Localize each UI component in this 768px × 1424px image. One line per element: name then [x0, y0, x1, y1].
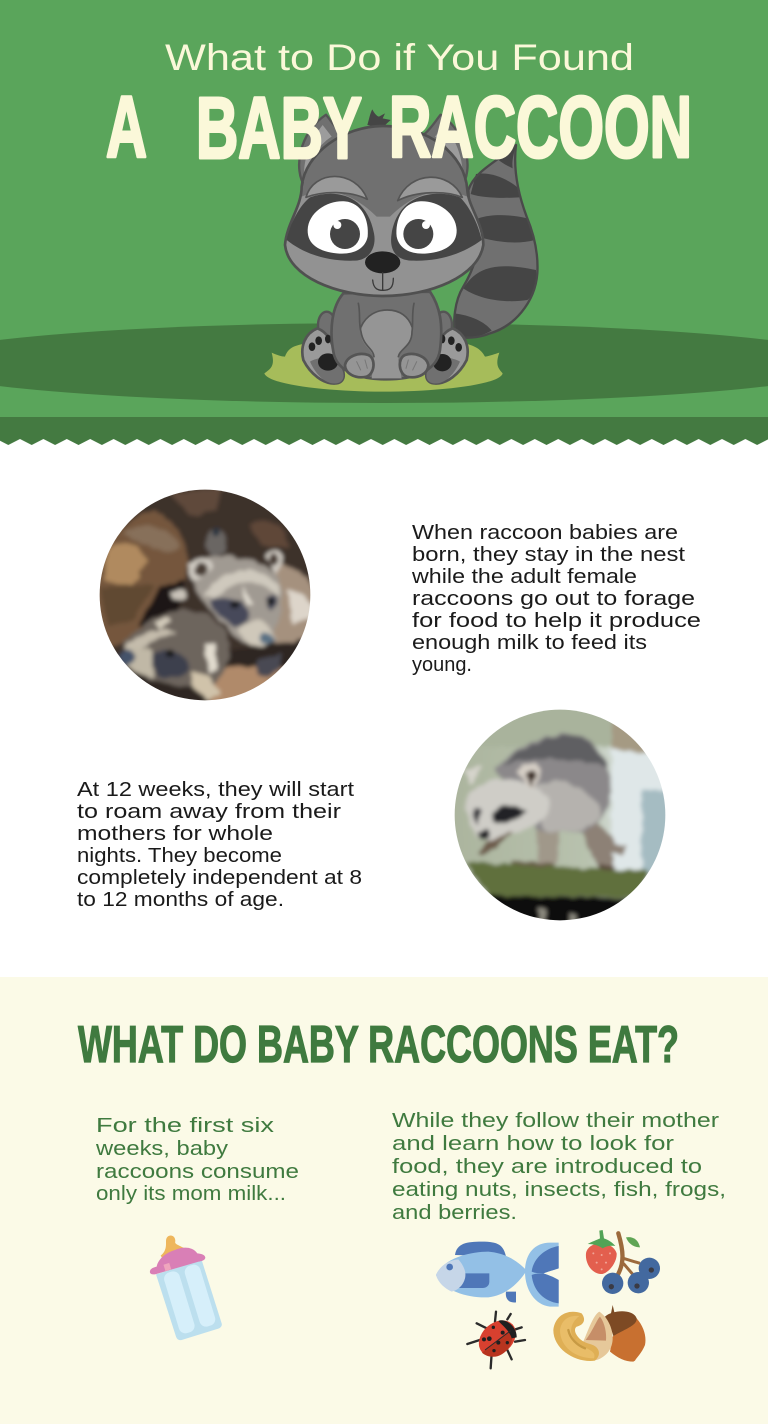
nose and mouth — [365, 251, 400, 290]
tail — [453, 145, 538, 338]
text: nest: while the adult female — [411, 565, 637, 588]
belly — [358, 303, 414, 378]
panel: independence — [77, 710, 666, 920]
text: independence — [77, 778, 362, 911]
text: independence: At 12 weeks, they will start — [77, 778, 354, 801]
icon: nuts — [553, 1305, 645, 1362]
head outline — [285, 126, 483, 296]
text: independence: to roam away from their — [77, 800, 341, 823]
illustration: baby raccoon — [264, 109, 538, 392]
subtitle: What to Do if You Found — [165, 37, 634, 78]
text: following their mother: eating nuts, insects, fish, frogs, — [392, 1178, 726, 1201]
panel: header — [0, 0, 768, 445]
text: nest: born, they stay in the nest — [412, 543, 685, 566]
text: independence: nights. They become — [77, 844, 282, 867]
text: first six weeks: For the first six — [96, 1114, 275, 1137]
icon: ladybug — [467, 1312, 525, 1368]
back legs — [318, 312, 452, 338]
text: following their mother: and berries. — [392, 1201, 517, 1224]
text: following their mother: and learn how to look for — [392, 1132, 674, 1155]
text: following their mother: food, they are introduced to — [392, 1155, 702, 1178]
tuft — [367, 109, 391, 127]
paw pads — [309, 335, 462, 371]
feet — [302, 328, 468, 383]
body — [332, 292, 441, 379]
title: BABY — [196, 80, 362, 177]
text: first six weeks: raccoons consume — [96, 1160, 299, 1183]
mask — [287, 194, 375, 261]
icon: strawberry and blueberries — [586, 1230, 660, 1294]
ears — [299, 115, 468, 187]
panel: what do baby raccoons eat — [0, 977, 768, 1424]
title — [106, 79, 692, 177]
forehead — [302, 127, 467, 217]
text: nest: enough milk to feed its — [412, 631, 647, 654]
text: first six weeks: only its mom milk... — [96, 1182, 286, 1205]
ground ellipse — [0, 323, 768, 403]
text: first six weeks: weeks, baby — [95, 1137, 229, 1160]
photo: raccoon babies in nest — [100, 490, 310, 700]
text: nest: for food to help it produce — [412, 609, 701, 632]
text: independence: to 12 months of age. — [77, 888, 284, 911]
head — [285, 126, 483, 296]
title: A — [106, 79, 147, 176]
panel: nest — [100, 490, 700, 700]
icon: fish — [436, 1242, 559, 1307]
zigzag band — [0, 417, 768, 445]
photo: young raccoon on a ledge — [454, 710, 666, 920]
icon: baby bottle — [150, 1235, 222, 1340]
text: nest — [411, 521, 701, 676]
grass — [264, 343, 503, 392]
text: following their mother — [392, 1109, 726, 1224]
text: nest: raccoons go out to forage — [412, 587, 695, 610]
text: nest: When raccoon babies are — [412, 521, 678, 544]
text: nest: young. — [412, 653, 472, 676]
brows — [306, 176, 367, 199]
text: following their mother: While they follow their mother — [392, 1109, 719, 1132]
eyes — [308, 201, 457, 254]
front paws — [345, 354, 428, 377]
text: independence: completely independent at 8 — [77, 866, 362, 889]
text: first six weeks — [95, 1114, 299, 1205]
text: independence: mothers for whole — [77, 822, 273, 845]
